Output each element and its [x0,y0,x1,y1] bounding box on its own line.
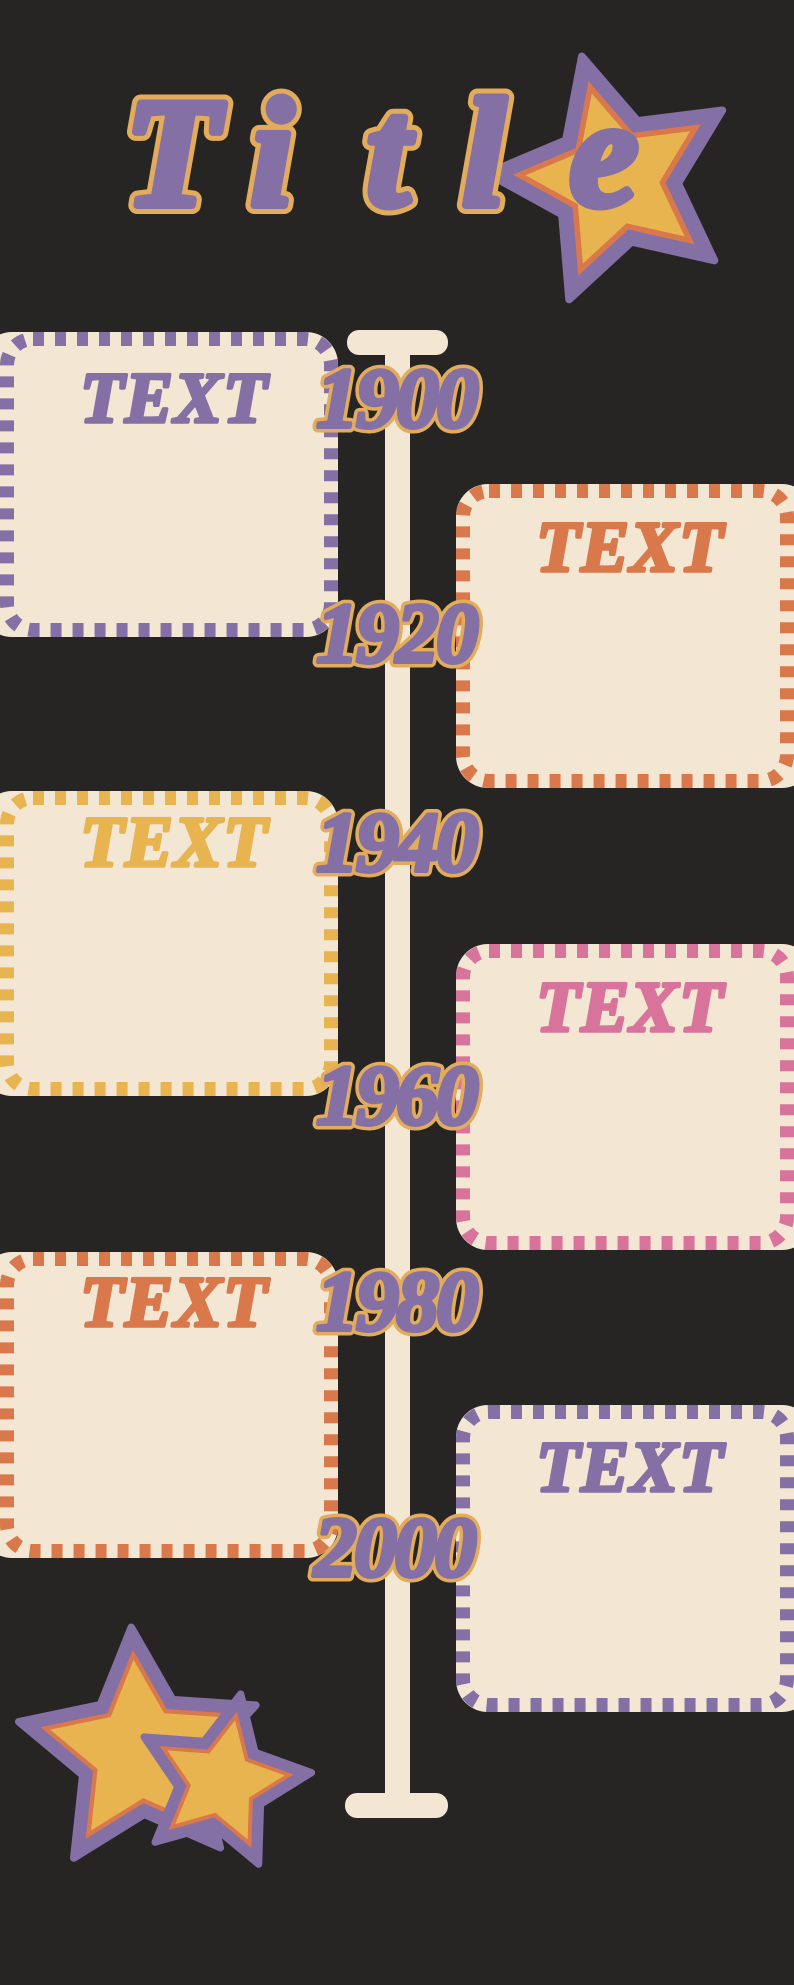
year labels: 1900 [316,350,478,446]
title: i [250,67,294,239]
year labels: 1980 [316,1253,478,1349]
title: i [250,67,294,239]
year labels: 2000 [312,1499,476,1595]
timeline axis [345,330,448,1818]
year labels: 1920 [316,585,478,681]
title star [464,25,759,312]
year labels: 1940 [316,794,478,890]
panel: box 4 right pink: TEXT [536,967,726,1047]
panel: box 2 right orange: TEXT [536,507,726,587]
year labels: 1900 [316,350,478,446]
icon: small bottom star [123,1676,324,1871]
title: e [570,67,638,239]
year labels: 1960 [316,1047,478,1143]
panel: box 4 right pink [456,944,794,1250]
title: t [366,67,413,239]
title: T [125,67,225,239]
title: l [462,67,506,239]
panel: box 2 right orange [456,484,794,788]
panel: box 6 right purple [456,1405,794,1712]
title: t [366,67,413,239]
year labels: 1960 [316,1047,478,1143]
panel: box 3 left yellow: TEXT [80,802,270,882]
title: T [125,67,225,239]
panel: box 5 left orange: TEXT [80,1262,270,1342]
year labels: 1980 [316,1253,478,1349]
panel: box 1 left purple: TEXT [80,358,270,438]
year labels: 1920 [316,585,478,681]
year labels: 2000 [312,1499,476,1595]
panel: box 3 left yellow [0,791,338,1096]
year labels [312,350,478,1595]
panel: box 5 left orange [0,1252,338,1558]
year labels: 1940 [316,794,478,890]
title: l [462,67,506,239]
icon: big bottom star [13,1619,266,1861]
title [125,67,638,239]
panel: box 6 right purple: TEXT [536,1427,726,1507]
panel: box 1 left purple [0,332,338,637]
